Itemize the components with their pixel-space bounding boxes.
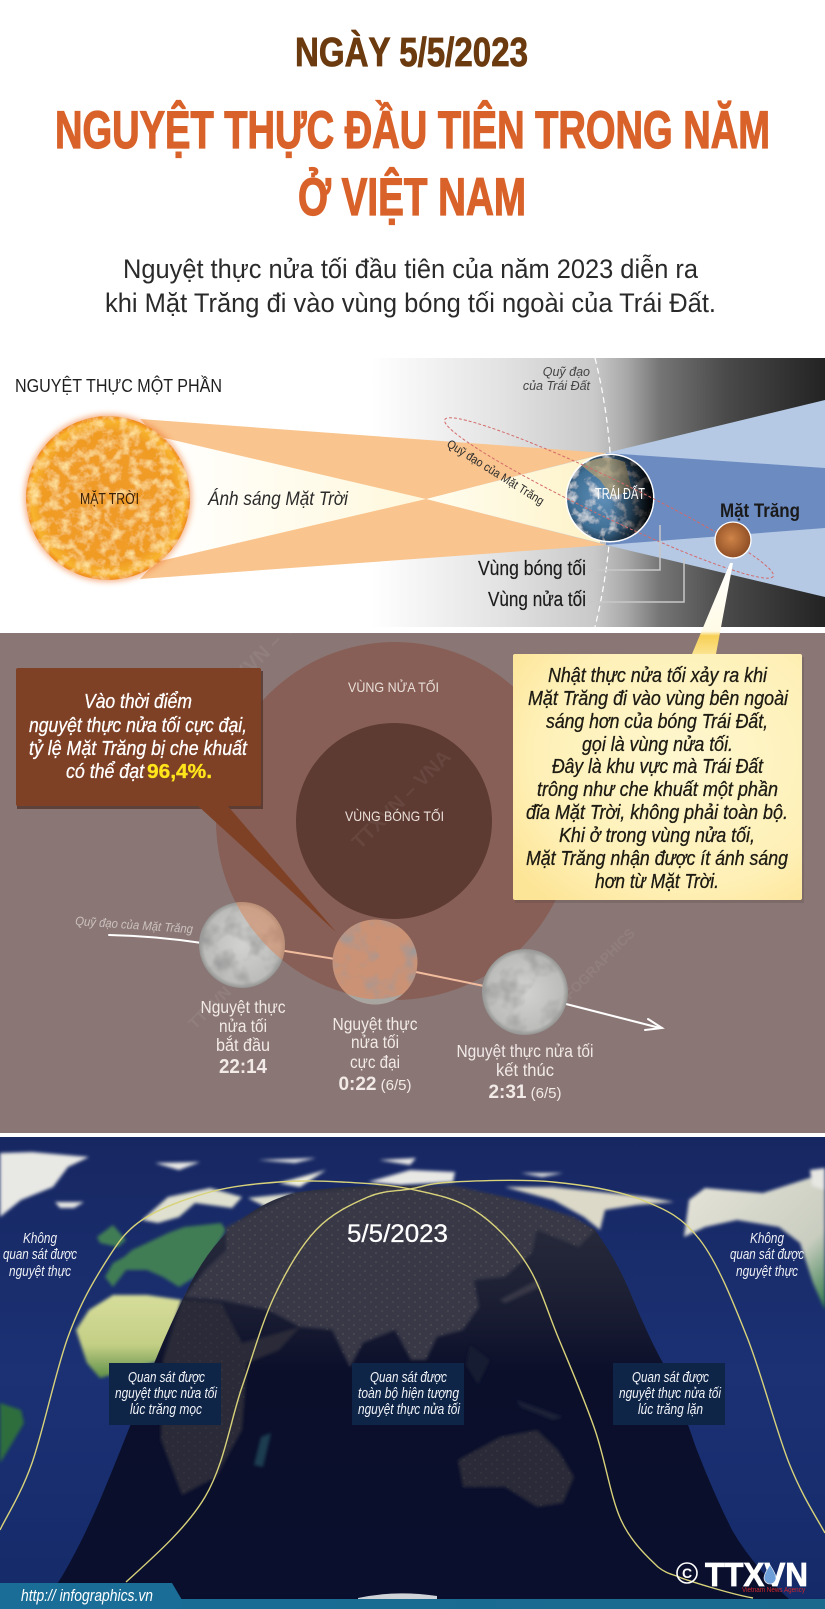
explanation text: gọi là vùng nửa tối. xyxy=(582,734,733,756)
sky gradient background xyxy=(0,358,825,627)
watermarks: INFOGRAPHICS xyxy=(551,925,638,1012)
daylight continents xyxy=(0,1152,825,1463)
box: moonrise view: lúc trăng mọc xyxy=(130,1401,202,1418)
earth orbit label: Quỹ đạo xyxy=(543,365,590,379)
label: left no view xyxy=(3,1230,77,1280)
label: left no view: nguyệt thực xyxy=(9,1263,71,1280)
date label: 5/5/2023 xyxy=(347,1220,448,1248)
explanation text: hơn từ Mặt Trời. xyxy=(595,871,719,893)
box: moonset view: nguyệt thực nửa tối xyxy=(619,1385,722,1402)
callout text: Vào thời điểm xyxy=(84,691,192,713)
city lights xyxy=(161,1185,595,1507)
box: moonset view: lúc trăng lặn xyxy=(638,1401,703,1418)
stage label: maximum: Nguyệt thực xyxy=(332,1014,418,1034)
visibility curves xyxy=(0,1180,825,1598)
umbra circle xyxy=(296,723,492,919)
box shadow xyxy=(515,657,804,903)
explanation text: đĩa Mặt Trời, không phải toàn bộ. xyxy=(526,802,788,824)
box: moonrise view: Quan sát được xyxy=(128,1369,205,1386)
penumbra callout: Vùng nửa tối xyxy=(488,589,586,611)
night continents xyxy=(161,1185,595,1507)
explanation text xyxy=(526,665,788,893)
yellow explanation callout xyxy=(513,563,804,903)
moon path label: Quỹ đạo của Mặt Trăng xyxy=(75,914,194,936)
box: full view xyxy=(352,1363,464,1425)
explanation text: trông như che khuất một phần xyxy=(537,779,778,801)
earth orbit dashed line xyxy=(595,358,612,627)
penumbra callout xyxy=(488,558,684,611)
umbra callout xyxy=(478,525,660,580)
box xyxy=(513,654,802,900)
icon: sun xyxy=(24,414,192,582)
explanation text: sáng hơn của bóng Trái Đất, xyxy=(546,711,768,733)
box: moonset view xyxy=(613,1363,725,1425)
date heading: NGÀY 5/5/2023 xyxy=(295,29,528,75)
callout shadow xyxy=(17,671,263,809)
stage label: maximum xyxy=(332,1014,418,1095)
ocean background xyxy=(0,1137,825,1609)
panel: visibility map xyxy=(0,1137,825,1609)
light blue penumbra xyxy=(606,400,825,597)
panel: eclipse geometry diagram xyxy=(0,358,825,627)
stage label: end: Nguyệt thực nửa tối xyxy=(456,1041,594,1061)
penumbra label: VÙNG NỬA TỐI xyxy=(348,678,439,695)
earth label: TRÁI ĐẤT xyxy=(595,484,645,503)
title block xyxy=(55,29,770,227)
explanation text: Khi ở trong vùng nửa tối, xyxy=(559,825,755,847)
stage label: maximum: 0:22 (6/5) xyxy=(338,1074,412,1095)
intro text: Nguyệt thực nửa tối đầu tiên của năm 2023 diễn ra xyxy=(123,254,698,284)
moon orbit label: Quỹ đạo của Mặt Trăng xyxy=(444,437,547,508)
callout tail xyxy=(197,805,336,932)
callout text: tỷ lệ Mặt Trăng bị che khuất xyxy=(29,738,248,760)
watermarks: TTXVN – VNA xyxy=(213,596,320,704)
stage label: end: 2:31 (6/5) xyxy=(488,1082,562,1103)
pointer from moon to box xyxy=(692,563,733,654)
callout text: 96,4%. xyxy=(147,761,212,783)
main title line 2: Ở VIỆT NAM xyxy=(298,166,526,227)
stage label: start xyxy=(200,997,286,1078)
label: left no view: Không xyxy=(23,1230,58,1247)
callout text: nguyệt thực nửa tối cực đại, xyxy=(29,715,247,737)
callout text: có thể đạt xyxy=(66,761,145,783)
icon: moon at start xyxy=(199,902,285,988)
orange beam bottom xyxy=(140,499,606,579)
stage label: start: 22:14 xyxy=(219,1056,268,1078)
icon: moon at maximum xyxy=(332,920,418,1005)
logo: TTXVN: Vietnam News Agency xyxy=(742,1587,805,1594)
section label: NGUYỆT THỰC MỘT PHẦN xyxy=(15,375,222,396)
stage label: maximum: cực đại xyxy=(350,1052,400,1072)
watermarks xyxy=(186,596,650,1033)
brown callout xyxy=(16,668,336,932)
label: right no view xyxy=(730,1230,804,1280)
moon orbit dashed ellipse xyxy=(437,402,781,594)
moon path with arrow xyxy=(109,935,662,1030)
label: right no view: Không xyxy=(750,1230,785,1247)
sunlight right cream wedge xyxy=(426,455,600,543)
label: right no view: quan sát được xyxy=(730,1246,804,1263)
footer bar with URL: http:// infographics.vn xyxy=(21,1587,153,1605)
watermarks: TTXVN – VNA xyxy=(348,746,455,854)
sunlight left cream wedge xyxy=(150,432,426,566)
orange beam top xyxy=(140,419,606,499)
explanation text: Đây là khu vực mà Trái Đất xyxy=(552,756,764,778)
intro text xyxy=(105,254,716,318)
box: full view: Quan sát được xyxy=(370,1369,447,1386)
icon: moon at end xyxy=(482,949,568,1035)
label: right no view: nguyệt thực xyxy=(736,1263,798,1280)
watermarks: INFOGRAPHICS xyxy=(551,784,650,883)
panel: penumbral eclipse stages xyxy=(0,596,825,1133)
dark blue umbra xyxy=(606,453,825,545)
explanation text: Mặt Trăng nhận được ít ánh sáng xyxy=(526,848,788,870)
box: full view: nguyệt thực nửa tối xyxy=(358,1401,461,1418)
explanation text: Mặt Trăng đi vào vùng bên ngoài xyxy=(528,688,788,710)
stage label: maximum: nửa tối xyxy=(351,1032,399,1052)
box: moonrise view: nguyệt thực nửa tối xyxy=(115,1385,218,1402)
stage label: end xyxy=(456,1041,594,1103)
box: moonset view: Quan sát được xyxy=(632,1369,709,1386)
intro text: khi Mặt Trăng đi vào vùng bóng tối ngoài của Trái Đất. xyxy=(105,288,716,318)
stage label: end: kết thúc xyxy=(496,1060,554,1080)
umbra label: VÙNG BÓNG TỐI xyxy=(345,807,444,824)
umbra callout: Vùng bóng tối xyxy=(478,558,586,580)
stage label: start: Nguyệt thực xyxy=(200,997,286,1017)
label: left no view: quan sát được xyxy=(3,1246,77,1263)
logo: TTXVN: TTXVN xyxy=(705,1556,808,1593)
box: full view: toàn bộ hiện tượng xyxy=(358,1385,460,1402)
callout text xyxy=(29,691,248,783)
night side xyxy=(40,1186,790,1609)
icon: earth xyxy=(566,454,654,542)
callout box xyxy=(16,668,261,806)
moon label: Mặt Trăng xyxy=(720,501,800,522)
panel background xyxy=(0,633,825,1133)
stage label: start: nửa tối xyxy=(219,1016,267,1036)
box: moonrise view xyxy=(109,1363,221,1425)
earth orbit label: của Trái Đất xyxy=(523,379,591,393)
earth orbit label xyxy=(523,365,591,393)
bottom white ice xyxy=(358,1593,437,1599)
antarctica xyxy=(263,1586,560,1599)
logo: TTXVN: C xyxy=(682,1565,692,1581)
penumbra circle xyxy=(216,642,574,1000)
sun label: MẶT TRỜI xyxy=(80,489,139,508)
stage label: start: bắt đầu xyxy=(216,1034,270,1055)
footer bar with URL xyxy=(0,1583,825,1609)
icon: moon xyxy=(715,522,751,558)
sunlight label: Ánh sáng Mặt Trời xyxy=(207,489,349,510)
watermarks: TTXVN xyxy=(186,984,235,1033)
explanation text: Nhật thực nửa tối xảy ra khi xyxy=(548,665,767,687)
